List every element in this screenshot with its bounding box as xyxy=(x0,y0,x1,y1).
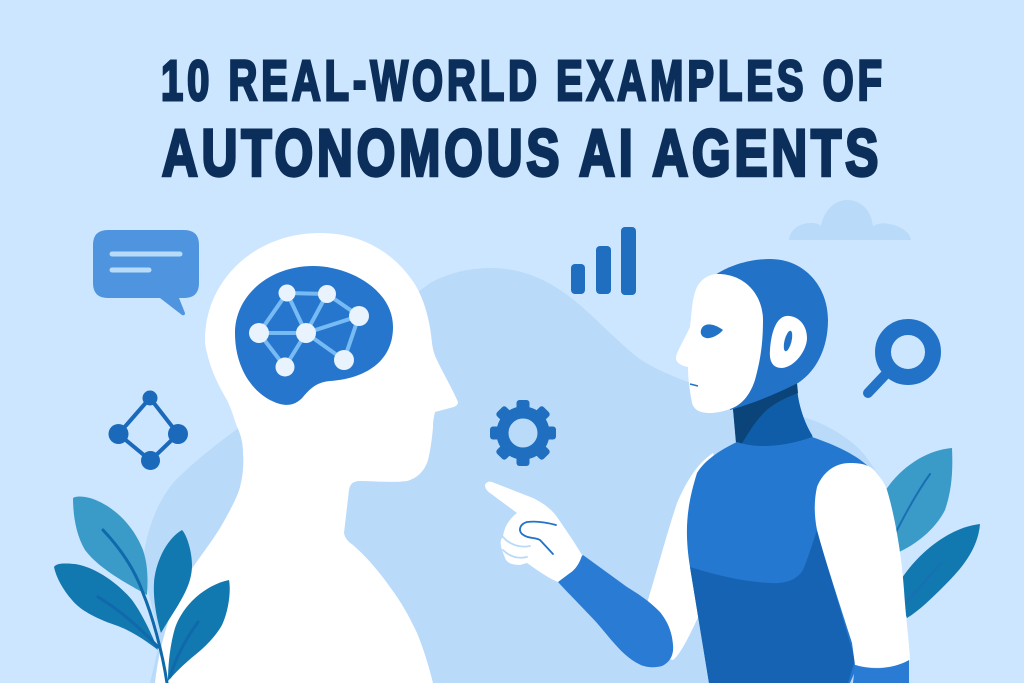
robot mouth xyxy=(690,384,698,386)
robot neck xyxy=(733,383,815,452)
robot head xyxy=(715,259,828,410)
title line 1: 10 REAL-WORLD EXAMPLES OF xyxy=(161,49,882,113)
icon: cloud xyxy=(789,200,911,240)
network edges xyxy=(259,293,359,367)
robot face xyxy=(676,274,763,413)
network nodes xyxy=(249,284,369,376)
human head and body silhouette xyxy=(155,233,458,683)
title line 2: AUTONOMOUS AI AGENTS xyxy=(162,117,878,190)
finger creases xyxy=(503,537,530,558)
brain with neural network xyxy=(235,266,393,405)
icon: diamond network xyxy=(108,390,188,470)
robot near arm xyxy=(815,463,910,668)
torso upper xyxy=(687,437,872,683)
leaf xyxy=(54,563,158,650)
robot torso xyxy=(687,437,872,683)
icon: bar chart xyxy=(571,227,636,295)
robot xyxy=(485,259,910,683)
robot neck shadow xyxy=(733,383,798,449)
robot wrist cuff xyxy=(853,660,909,683)
leaf xyxy=(73,496,148,595)
right plant xyxy=(880,448,980,618)
robot eye xyxy=(701,324,723,338)
stem and veins xyxy=(98,530,198,683)
left plant xyxy=(54,496,230,683)
robot far upper arm xyxy=(648,453,730,660)
background blob xyxy=(143,268,890,683)
icon: chat bubble xyxy=(93,230,199,315)
icon: gear xyxy=(490,400,556,466)
leaf xyxy=(154,530,192,633)
leaf xyxy=(895,524,980,618)
torso lower xyxy=(690,530,855,683)
thumb line xyxy=(520,522,556,554)
icon: magnifying glass xyxy=(868,327,933,393)
leaf xyxy=(168,580,230,681)
leaf veins xyxy=(893,474,941,600)
title xyxy=(161,49,882,190)
robot ear xyxy=(770,316,807,368)
robot pointing hand xyxy=(485,482,582,582)
leaf xyxy=(880,448,952,553)
robot forearm xyxy=(558,555,673,667)
brain shape xyxy=(235,266,393,405)
